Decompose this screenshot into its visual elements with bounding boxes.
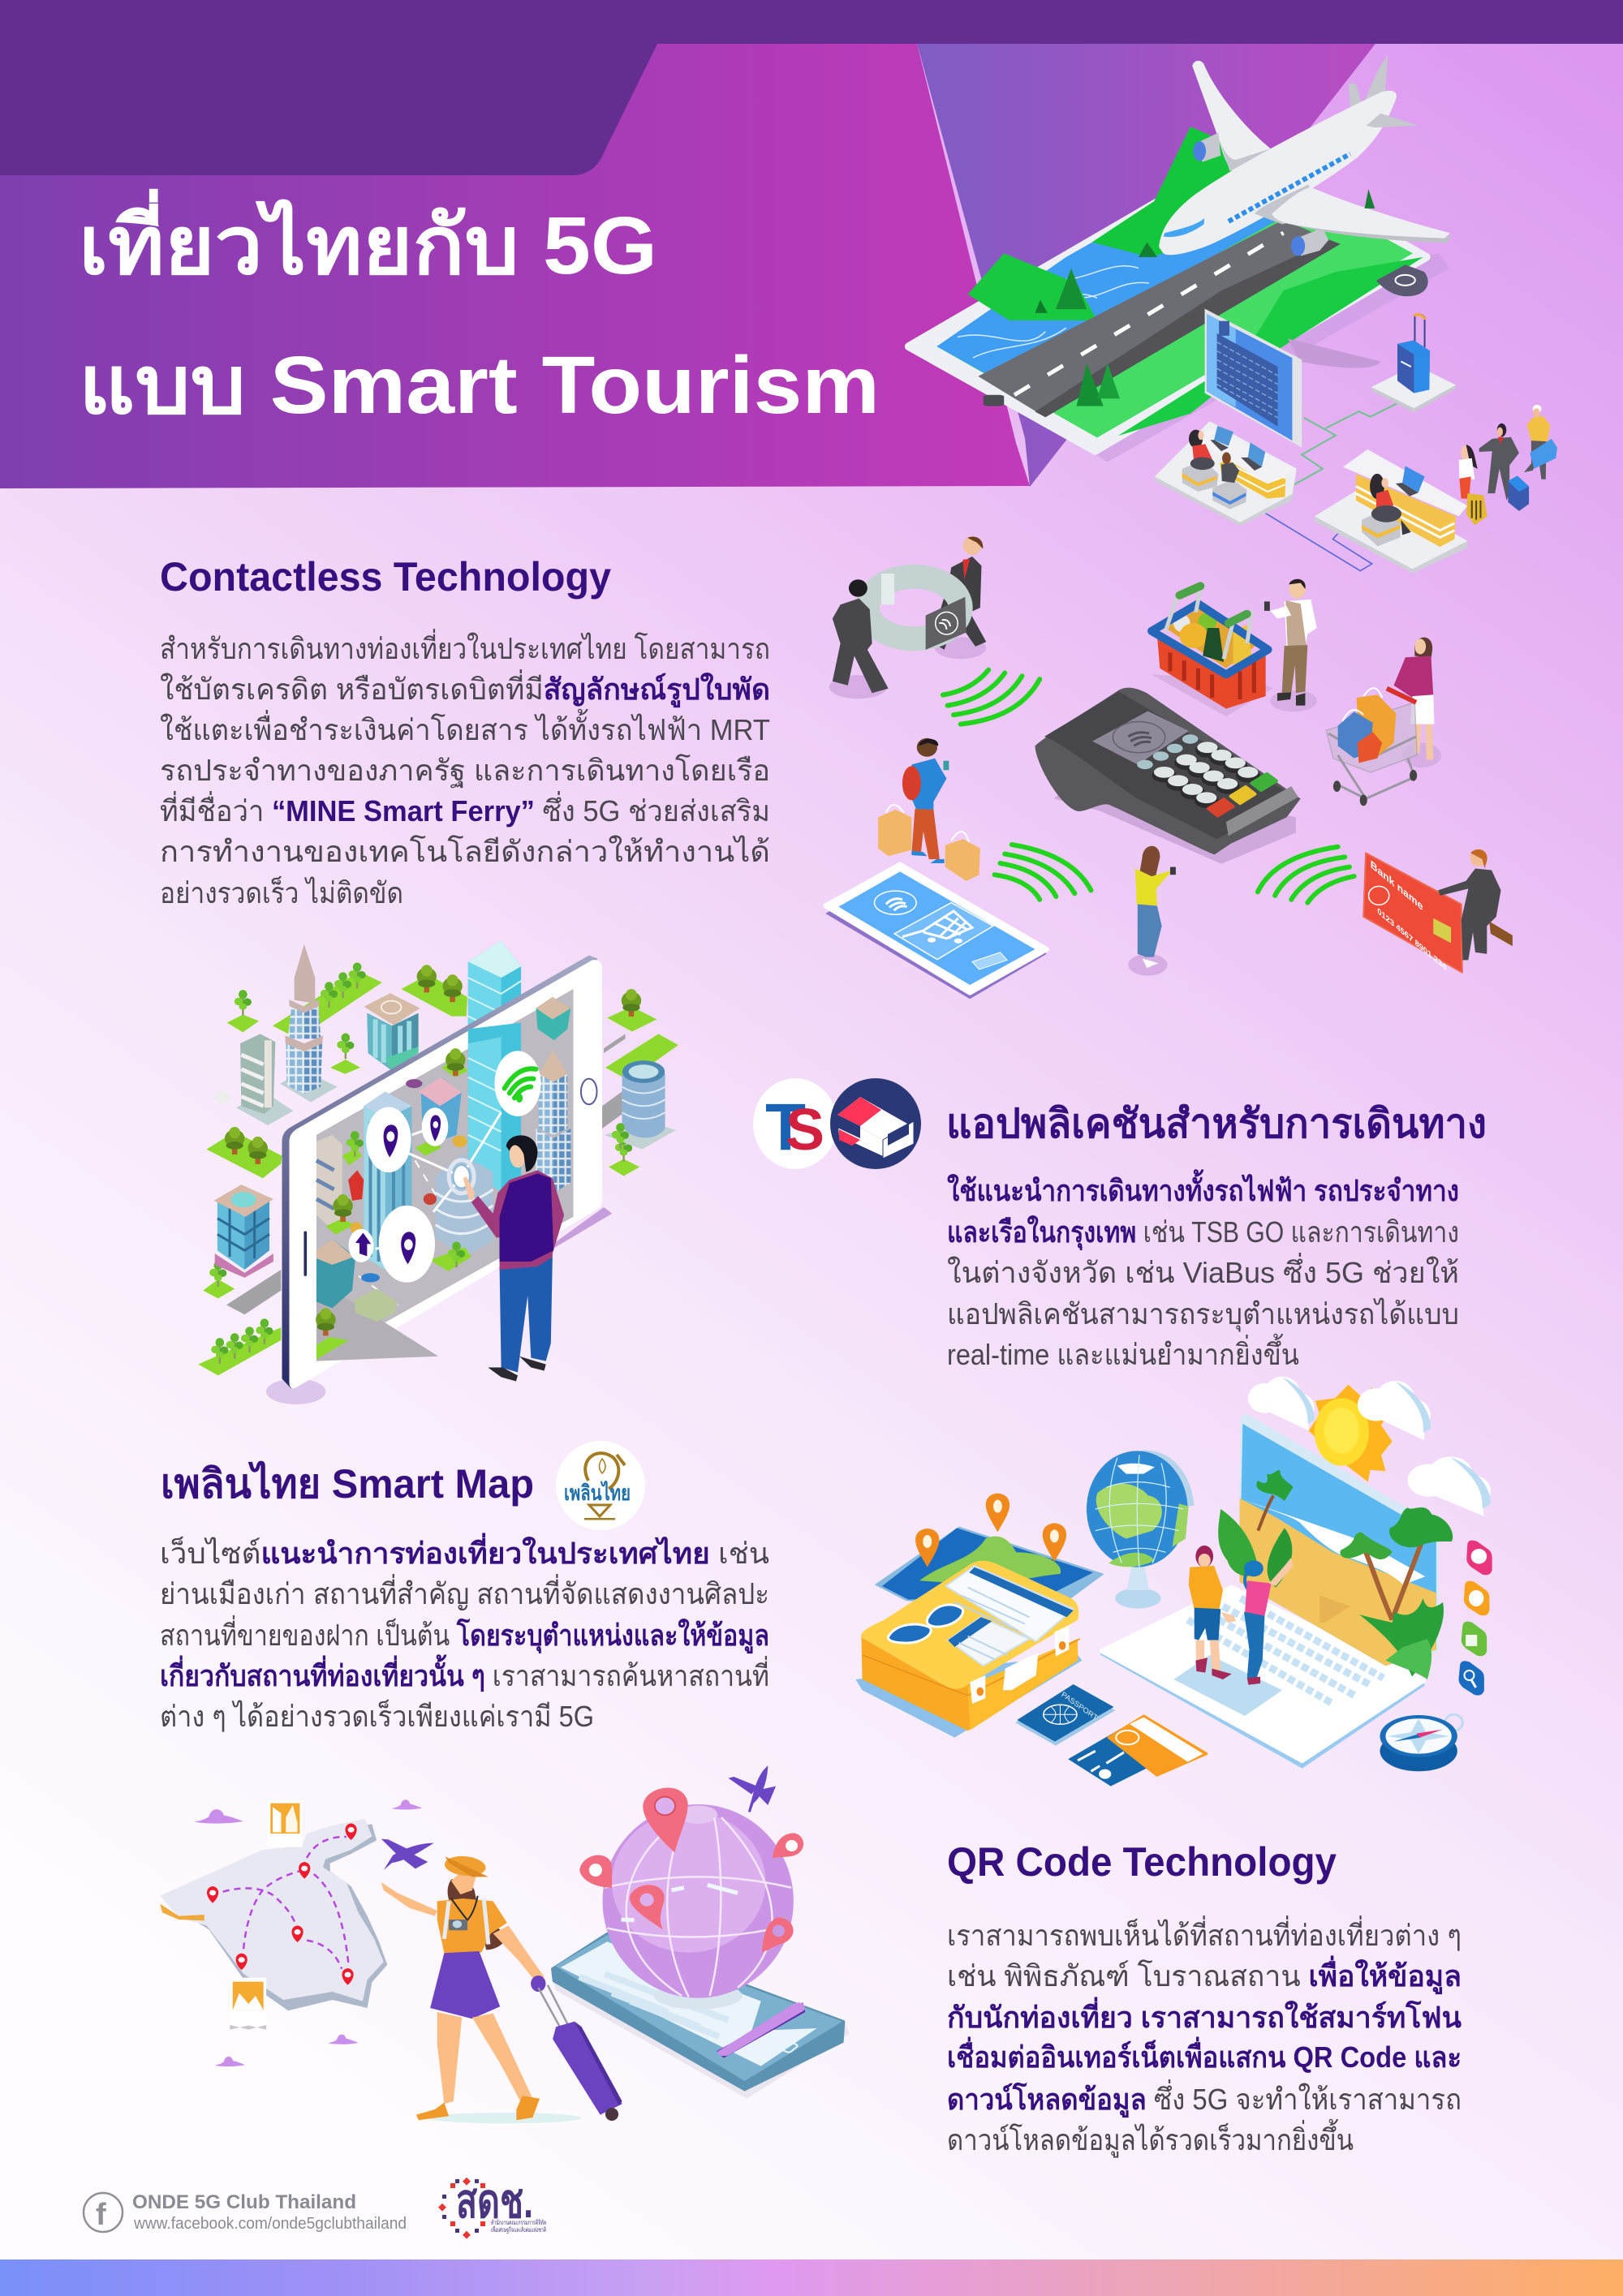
green wave arcs top-left [943,670,1040,724]
text block: travel applications: แอปพลิเคชันสำหรับการเดินทาง [946,1101,1487,1146]
tourist woman [381,1853,622,2123]
man with coffee and phone [1264,579,1317,712]
airplane [1159,55,1453,256]
small clouds [194,1799,422,2066]
credit card with man: 0123 4567 8901 234 [1377,906,1447,974]
text block: Contactless Technology: ใช้แตะเพื่อชำระเงินค่าโดยสาร ได้ทั้งรถไฟฟ้า MRT [160,708,770,746]
text block: Contactless Technology: Contactless Technology [160,554,611,600]
footer: ONDE logo [438,2175,546,2239]
map with pins [875,1494,1104,1606]
text block: travel applications: และเรือในกรุงเทพ เช่น TSB GO และการเดินทาง [947,1215,1459,1251]
text block: Plern Thai Smart Map: เกี่ยวกับสถานที่ท่องเที่ยวนั้น ๆ เราสามารถค้นหาสถานที่ [160,1654,769,1692]
phone with cart app [825,865,1047,999]
footer: ONDE logo: เพื่อเศรษฐกิจและสังคมแห่งชาติ [491,2225,546,2234]
purple planes [381,1769,776,1870]
in-screen city [316,997,570,1361]
text block: travel applications [946,1101,1487,1371]
text block: Contactless Technology: รถประจำทางของภาครัฐ และการเดินทางโดยเรือ [160,754,770,789]
illustration: city on tablet [198,941,678,1404]
couple [1189,1546,1294,1685]
footer: ONDE logo: สำนักงานคณะกรรมการดิจิทัล [491,2219,546,2226]
passport: PASSPORT [1061,1689,1100,1722]
spire tower [280,944,338,1103]
credit card with man [1363,849,1513,974]
title: เที่ยวไทยกับ 5G [79,188,657,291]
logo: TSB: S [786,1098,824,1163]
title [79,188,880,431]
logo: TSB [753,1078,921,1169]
text block: Plern Thai Smart Map: ย่านเมืองเก่า สถานที่สำคัญ สถานที่จัดแสดงงานศิลปะ [160,1574,769,1610]
round roof building right [605,1060,676,1150]
text block: Contactless Technology [160,554,770,909]
text block: travel applications: real-time และแม่นยำมากยิ่งขึ้น [947,1333,1299,1371]
text block: QR Code Technology [947,1839,1462,2158]
passport [1015,1684,1115,1746]
green wave arcs bottom-right [1258,847,1354,903]
text block: Plern Thai Smart Map [160,1460,769,1733]
Thailand style map [160,1799,387,2030]
logo: Plern Thai: เพลินไทย [564,1480,631,1505]
footer: Facebook contact: f [96,2198,106,2232]
text block: Contactless Technology: การทำงานของเทคโนโลยีดังกล่าวให้ทำงานได้ [160,835,770,868]
bottom gradient bar [0,2259,1623,2296]
text block: QR Code Technology: กับนักท่องเที่ยว เราสามารถใช้สมาร์ทโฟน [947,1997,1462,2034]
text block: Contactless Technology: ใช้บัตรเครดิต หรือบัตรเดบิตที่มีสัญลักษณ์รูปใบพัด [160,669,770,708]
header banner [0,0,1623,488]
text block: QR Code Technology: ดาวน์โหลดข้อมูล ซึ่ง 5G จะทำให้เราสามารถ [947,2079,1462,2118]
text block: QR Code Technology: เราสามารถพบเห็นได้ที่สถานที่ท่องเที่ยวต่าง ๆ [947,1915,1462,1952]
footer: Facebook contact: ONDE 5G Club Thailand [132,2191,356,2213]
yellow suitcase [855,1561,1083,1738]
green wave arcs bottom-left [995,845,1091,900]
purple globe with pins [579,1787,803,2010]
text block: Contactless Technology: อย่างรวดเร็ว ไม่ติดขัด [160,875,403,909]
text block: Plern Thai Smart Map: เพลินไทย Smart Map [161,1460,534,1507]
man with shopping bags [878,738,980,881]
logo: Plern Thai [556,1441,645,1530]
tall glass tower [468,941,521,1193]
globe [1087,1451,1189,1609]
palms and plants [1218,1470,1453,1679]
illustration: contactless payment scene [825,536,1513,999]
compass [1380,1714,1462,1771]
location markers and connectors [349,1051,541,1283]
check-in desk right [1315,449,1467,574]
social app icons [1458,1541,1492,1696]
footer: Facebook contact [84,2191,407,2233]
text block: Contactless Technology: สำหรับการเดินทางท่องเที่ยวในประเทศไทย โดยสามารถ [160,629,770,665]
outer city blocks [198,963,678,1375]
logo: TSB: T [765,1090,806,1164]
phone under globe [551,1933,850,2099]
tablet frame [266,955,612,1404]
monitor panel [1205,308,1302,448]
suitcase on platform [1371,314,1456,412]
text block: Plern Thai Smart Map: สถานที่ขายของฝาก เป็นต้น โดยระบุตำแหน่งและให้ข้อมูล [160,1615,769,1654]
woman with shopping cart [1326,638,1441,806]
text block: QR Code Technology: เชื่อมต่ออินเทอร์เน็ตเพื่อแสกน QR Code และ [947,2036,1462,2074]
text block: Contactless Technology: ที่มีชื่อว่า “MINE Smart Ferry” ซึ่ง 5G ช่วยส่งเสริม [160,791,770,828]
credit card with man: Bank name [1371,858,1423,914]
apartment block [213,1034,293,1125]
footer: Facebook contact: www.facebook.com/onde5gclubthailand [133,2215,407,2233]
footer: ONDE logo: สดช. [456,2175,533,2228]
text block: travel applications: ในต่างจังหวัด เช่น ViaBus ซึ่ง 5G ช่วยให้ [947,1253,1459,1289]
pink roof building left [213,1185,273,1278]
text block: QR Code Technology: เช่น พิพิธภัณฑ์ โบราณสถาน เพื่อให้ข้อมูล [947,1955,1462,1995]
title: แบบ Smart Tourism [79,340,880,431]
text block: QR Code Technology: QR Code Technology [947,1839,1337,1885]
illustration: beach travel on laptop [855,1377,1492,1786]
laptop [1102,1414,1439,1766]
illustration: tourist with map and globe [160,1769,850,2123]
shopping basket [1152,586,1272,716]
man touching tablet [463,1135,564,1382]
connector lines [1264,404,1397,571]
sun and clouds [1248,1377,1491,1516]
POS terminal [1035,688,1301,864]
men carrying smartwatch [829,536,986,699]
text block: QR Code Technology: ดาวน์โหลดข้อมูลได้รวดเร็วมากยิ่งขึ้น [947,2118,1354,2158]
text block: travel applications: แอปพลิเคชันสามารถระบุตำแหน่งรถได้แบบ [947,1297,1459,1332]
text block: Plern Thai Smart Map: เว็บไซต์แนะนำการท่องเที่ยวในประเทศไทย เช่น [160,1533,769,1570]
helipad building [364,993,420,1070]
travellers group [1459,405,1557,525]
text block: travel applications: ใช้แนะนำการเดินทางทั้งรถไฟฟ้า รถประจำทาง [947,1169,1459,1207]
check-in desk left [1155,421,1297,526]
credit cards [1068,1716,1207,1786]
illustration: smartphone airport runway with plane [909,55,1557,574]
text block: Plern Thai Smart Map: ต่าง ๆ ได้อย่างรวดเร็วเพียงแค่เรามี 5G [160,1698,594,1733]
woman in yellow with phone [1128,846,1176,976]
